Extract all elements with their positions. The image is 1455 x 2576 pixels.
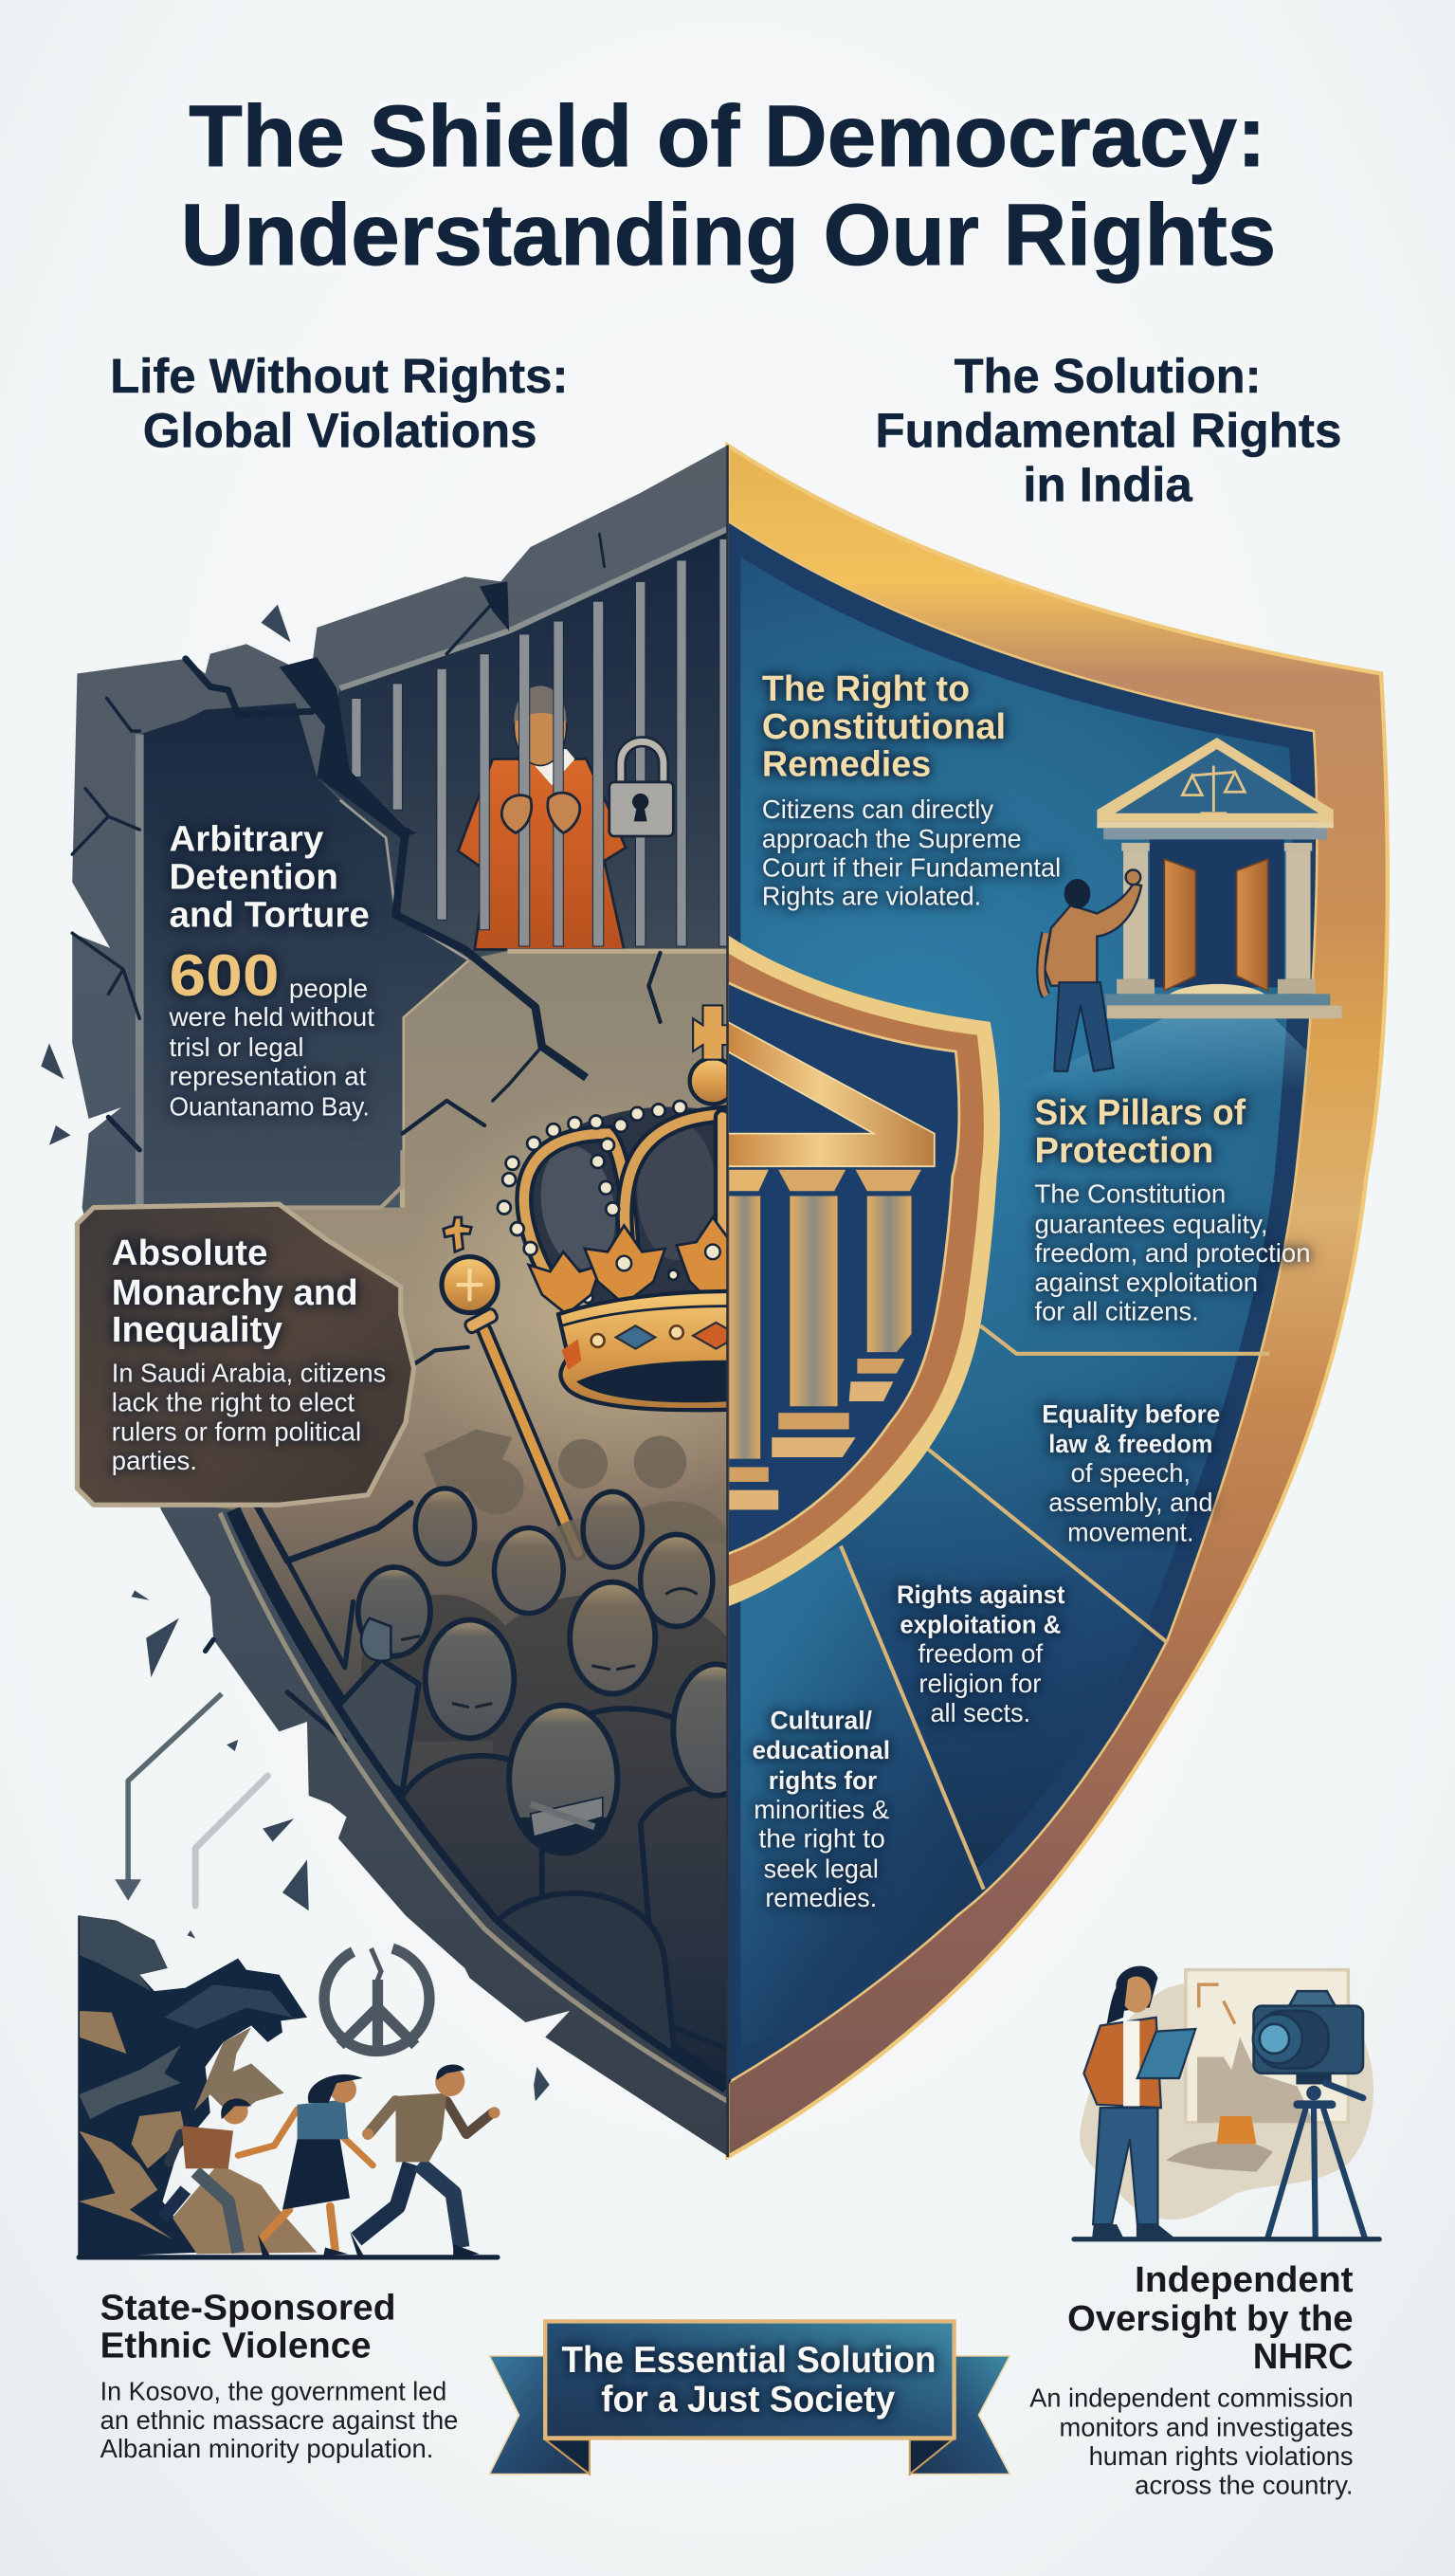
text: six pillars of protection: for all citizens. xyxy=(1034,1296,1199,1325)
gagged front figure xyxy=(499,1703,677,2050)
text: state-sponsored ethnic violence xyxy=(100,2289,458,2463)
text: independent oversight by the NHRC xyxy=(1029,2260,1354,2499)
shield: right half, fundamental rights xyxy=(728,446,1388,2157)
text: state-sponsored ethnic violence: State-Sponsored xyxy=(100,2289,396,2329)
crown orb and cross xyxy=(688,1058,726,1106)
text: right to constitutional remedies: Rights are violated. xyxy=(762,882,981,911)
panel: absolute monarchy xyxy=(77,1204,414,1505)
text: equality and freedom: law & freedom xyxy=(1048,1430,1212,1458)
heading: life without rights: Global Violations xyxy=(143,403,537,457)
text: independent oversight by the NHRC: Oversight by the xyxy=(1067,2299,1354,2339)
investigator xyxy=(1083,1966,1195,2238)
text: cultural and educational rights: educational xyxy=(752,1736,890,1764)
emblem: scepter xyxy=(442,1217,578,1552)
text: right to constitutional remedies: Constitutional xyxy=(762,707,1006,747)
text: arbitrary detention: 600 xyxy=(169,943,280,1009)
text: arbitrary detention: Arbitrary xyxy=(169,820,323,860)
text: equality and freedom: of speech, xyxy=(1071,1458,1191,1488)
text: absolute monarchy: Monarchy and xyxy=(112,1273,358,1313)
inner gold shield xyxy=(728,935,1000,1607)
banner left tail xyxy=(489,2356,590,2475)
inner temple columns xyxy=(729,1170,921,1509)
text: right to constitutional remedies: Remedies xyxy=(762,745,931,785)
centre seam xyxy=(726,446,728,2157)
text: absolute monarchy: Inequality xyxy=(112,1310,282,1350)
heading: the solution: in India xyxy=(1023,457,1192,511)
evidence board xyxy=(1186,1970,1348,2123)
text: absolute monarchy: lack the right to elect xyxy=(112,1387,355,1416)
shield: left half, broken stone xyxy=(72,446,758,2157)
text: six pillars of protection: Protection xyxy=(1034,1131,1213,1171)
heading: the solution: The Solution: xyxy=(955,349,1262,403)
crowd of silenced people xyxy=(341,1430,726,2052)
ground line xyxy=(79,2256,498,2258)
text: equality and freedom xyxy=(1042,1400,1220,1546)
text: arbitrary detention: Ouantanamo Bay. xyxy=(169,1092,370,1122)
text: rights against exploitation: Rights against xyxy=(897,1580,1065,1609)
dividers between rights segments xyxy=(841,1325,1269,1890)
cell bars xyxy=(352,539,728,946)
text: cultural and educational rights: seek legal xyxy=(764,1854,879,1884)
arrow: dark, down to ethnic violence xyxy=(115,1693,222,1901)
title: The Shield of Democracy: xyxy=(189,88,1266,185)
fleeing man xyxy=(350,2064,500,2257)
text: independent oversight by the NHRC: monitors and investigates xyxy=(1059,2413,1354,2442)
barred cell wall xyxy=(317,529,728,959)
text: cultural and educational rights: Cultural/ xyxy=(771,1707,872,1735)
banner text xyxy=(562,2340,937,2421)
text: arbitrary detention xyxy=(168,820,374,1122)
eyes and brows xyxy=(402,1589,697,1707)
text: rights against exploitation: exploitation & xyxy=(900,1610,1061,1638)
text: equality and freedom: Equality before xyxy=(1042,1400,1220,1429)
text: equality and freedom: assembly, and xyxy=(1048,1488,1212,1517)
stone cracks xyxy=(72,534,660,1742)
text: arbitrary detention: trisl or legal xyxy=(169,1032,304,1062)
text: independent oversight by the NHRC: NHRC xyxy=(1253,2337,1354,2377)
title: Understanding Our Rights xyxy=(181,187,1276,283)
crown band xyxy=(558,1291,731,1410)
background silhouettes xyxy=(424,1430,726,1561)
heading: life without rights: Life Without Rights: xyxy=(110,349,568,403)
wolf shapes xyxy=(79,1915,307,2257)
prisoner in orange xyxy=(458,685,626,950)
text: right to constitutional remedies xyxy=(762,669,1061,911)
emblem: crown xyxy=(498,1005,755,1410)
crowd rear row xyxy=(361,1486,726,1756)
title xyxy=(181,88,1276,283)
heading: life without rights xyxy=(110,349,568,457)
icon: padlock xyxy=(609,741,673,836)
flying stone fragments xyxy=(41,605,550,2101)
text: cultural and educational rights: minorities & xyxy=(754,1795,890,1824)
text: absolute monarchy: rulers or form political xyxy=(112,1417,361,1447)
blue shield field xyxy=(728,521,1317,2083)
text: absolute monarchy xyxy=(112,1233,386,1475)
camera xyxy=(1253,1991,1363,2083)
icon: scales of justice xyxy=(1182,765,1245,813)
text: cultural and educational rights: remedies. xyxy=(765,1883,877,1912)
heading: the solution xyxy=(875,349,1341,511)
text: absolute monarchy: parties. xyxy=(112,1446,197,1475)
text: state-sponsored ethnic violence: In Kosovo, the government led xyxy=(100,2377,446,2406)
text: arbitrary detention: people xyxy=(289,974,368,1003)
text: independent oversight by the NHRC: across the country. xyxy=(1135,2470,1354,2499)
text: cultural and educational rights xyxy=(752,1707,890,1912)
text: rights against exploitation xyxy=(897,1580,1065,1727)
text: cultural and educational rights: the right to xyxy=(758,1824,885,1854)
text: rights against exploitation: all sects. xyxy=(930,1698,1030,1727)
illustration: people fleeing violence xyxy=(79,1915,500,2257)
text: absolute monarchy: In Saudi Arabia, citizens xyxy=(112,1358,386,1387)
crown pearls xyxy=(498,1101,686,1303)
arrow: light, faded xyxy=(195,1776,267,1906)
illustration: NHRC investigator with camera xyxy=(1074,1966,1379,2239)
text: six pillars of protection: Six Pillars of xyxy=(1034,1093,1246,1133)
icon: supreme court building xyxy=(1005,738,1341,1092)
text: six pillars of protection xyxy=(1034,1093,1311,1325)
text: arbitrary detention: Detention xyxy=(169,857,338,897)
banner: essential solution xyxy=(489,2321,1009,2475)
ground line xyxy=(1074,2238,1379,2240)
text: right to constitutional remedies: Citizens can directly xyxy=(762,795,993,824)
text: state-sponsored ethnic violence: Ethnic Violence xyxy=(100,2327,372,2366)
text: independent oversight by the NHRC: An independent commission xyxy=(1029,2384,1354,2413)
heading: the solution: Fundamental Rights xyxy=(875,403,1341,457)
text: absolute monarchy: Absolute xyxy=(112,1233,267,1273)
left inner field fading tan to navy xyxy=(197,951,727,2087)
inner shield stripe and band xyxy=(220,1509,728,2101)
upper navy fissure xyxy=(480,581,509,630)
text: six pillars of protection: freedom, and protection xyxy=(1034,1238,1311,1268)
text: independent oversight by the NHRC: Independent xyxy=(1135,2260,1354,2300)
icon: broken peace symbol xyxy=(324,1948,429,2051)
prisoner hands on bars xyxy=(501,793,580,833)
text: rights against exploitation: religion for xyxy=(918,1669,1041,1698)
text: equality and freedom: movement. xyxy=(1067,1517,1194,1546)
gold shield rim xyxy=(728,446,1388,2157)
banner text: for a Just Society xyxy=(601,2380,896,2421)
text: arbitrary detention: were held without xyxy=(168,1002,374,1032)
wide navy fissure xyxy=(280,657,417,838)
banner text: The Essential Solution xyxy=(562,2340,937,2381)
beige backdrop xyxy=(1080,1977,1373,2220)
text: right to constitutional remedies: The Right to xyxy=(762,669,970,709)
banner right tail xyxy=(910,2356,1009,2475)
panel: arbitrary detention xyxy=(139,703,587,1208)
text: state-sponsored ethnic violence: an ethnic massacre against the xyxy=(100,2405,458,2435)
text: right to constitutional remedies: Court if their Fundamental xyxy=(762,852,1061,882)
fleeing boy xyxy=(163,2098,274,2253)
flames xyxy=(79,2011,317,2254)
text: cultural and educational rights: rights for xyxy=(769,1766,878,1795)
tripod xyxy=(1267,2083,1365,2238)
text: independent oversight by the NHRC: human rights violations xyxy=(1089,2441,1354,2471)
text: six pillars of protection: against exploitation xyxy=(1034,1268,1258,1297)
inner temple pediment xyxy=(728,1022,935,1166)
cracked stone rim xyxy=(72,446,729,2157)
icon: citizen at the door xyxy=(1041,870,1141,1071)
text: state-sponsored ethnic violence: Albanian minority population. xyxy=(100,2434,433,2463)
text: arbitrary detention: and Torture xyxy=(169,895,370,935)
text: rights against exploitation: freedom of xyxy=(918,1639,1043,1669)
text: arbitrary detention: representation at xyxy=(169,1061,367,1091)
text: right to constitutional remedies: approach the Supreme xyxy=(762,824,1022,853)
crown fleurons xyxy=(526,1215,726,1312)
crowd middle row xyxy=(341,1564,726,2052)
text: six pillars of protection: guarantees equality, xyxy=(1034,1209,1267,1238)
fleeing woman xyxy=(258,2074,373,2257)
text: six pillars of protection: The Constitution xyxy=(1034,1178,1226,1208)
